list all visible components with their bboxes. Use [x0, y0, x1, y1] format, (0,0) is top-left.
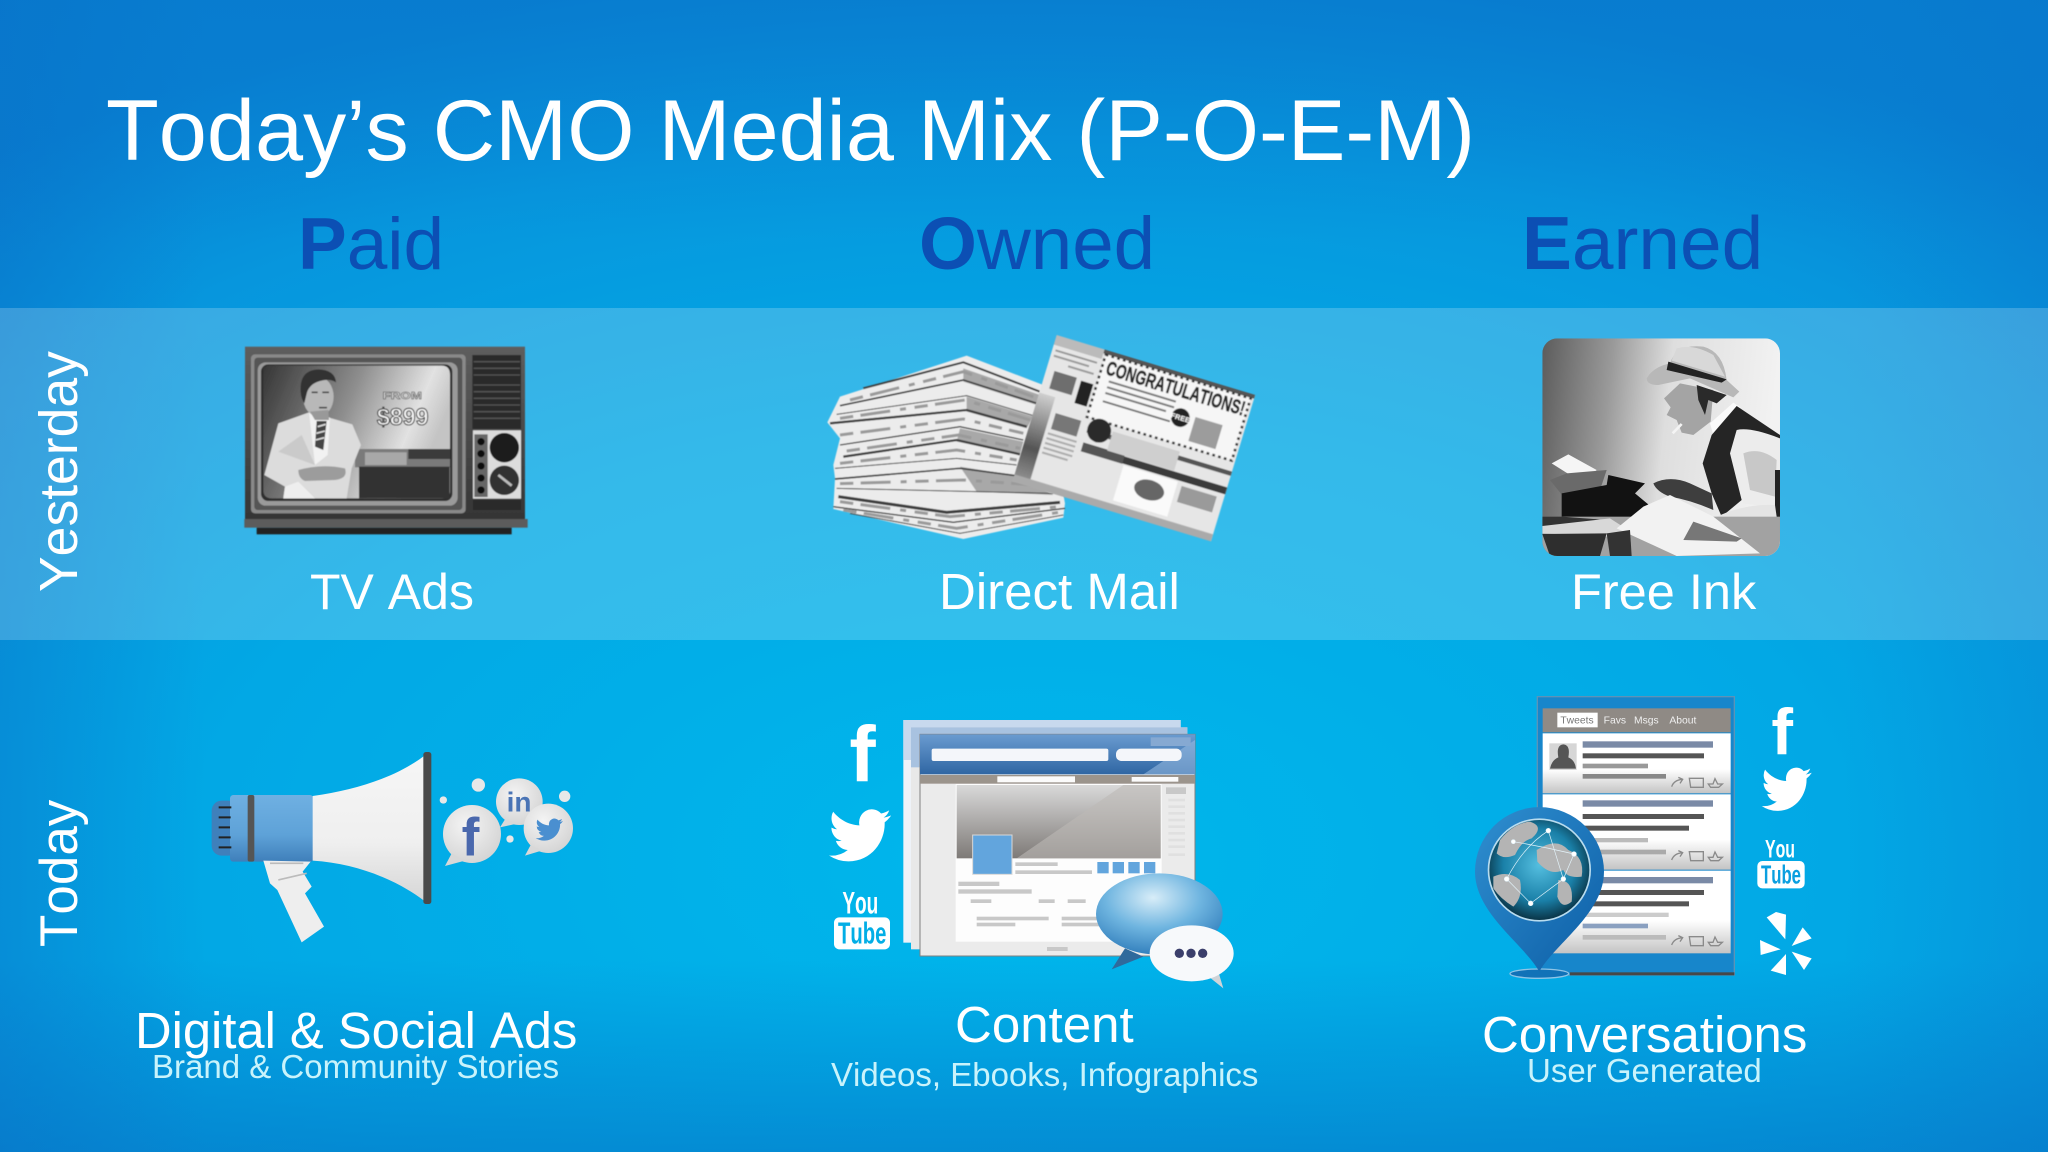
writer arm [1653, 479, 1713, 510]
heading: Paid: Paid [298, 204, 444, 285]
mail congratulations panel: FREE [1170, 411, 1191, 425]
label: Free Ink: Free Ink [1571, 563, 1757, 620]
mail congratulations panel: CONGRATULATIONS! [1103, 357, 1248, 420]
label: Digital & Social Ads: Digital & Social Ads [135, 1002, 577, 1059]
label: Direct Mail: Direct Mail [939, 563, 1180, 620]
feed tabs: Msgs [1634, 716, 1659, 727]
mail congratulations panel [1087, 355, 1251, 461]
icon: tweet feed page [1537, 697, 1734, 975]
feed tabs: Favs [1604, 716, 1626, 727]
desk and papers [1542, 495, 1780, 556]
globe network lines [1504, 828, 1576, 906]
blue speech bubble [1096, 873, 1223, 969]
Facebook logo: f [1771, 695, 1793, 768]
label: Content: Content [955, 996, 1134, 1053]
TV screen text: FROM [383, 391, 422, 402]
icons: Earned social logos [1757, 695, 1812, 975]
title: Today’s CMO Media Mix (P-O-E-M) [106, 83, 1475, 179]
TV screen text: $899 [377, 404, 428, 431]
icon: retro TV [244, 347, 528, 534]
icon: direct mail page [1012, 335, 1255, 541]
TV presenter [264, 369, 361, 498]
row label: Yesterday: Yesterday [30, 351, 89, 592]
YouTube logo: Tube [1761, 859, 1801, 889]
icon: megaphone with social bubbles [212, 752, 573, 942]
writer collar [1710, 403, 1740, 433]
writer face [1664, 383, 1713, 435]
feed tabs [1557, 713, 1696, 727]
writer shirt [1730, 427, 1780, 508]
Twitter logo [829, 809, 891, 861]
white speech bubble [1150, 925, 1234, 988]
feed action icons [1672, 777, 1722, 946]
YouTube logo: Tube [838, 916, 886, 950]
sublabel: Brand & Community Stories: Brand & Community Stories [152, 1048, 559, 1085]
YouTube logo: You [842, 885, 878, 920]
YouTube logo: You [1765, 836, 1795, 863]
icon: web page mockup with speech bubbles [903, 720, 1234, 988]
sublabel: User Generated: User Generated [1527, 1052, 1762, 1089]
globe continents [1493, 822, 1582, 907]
Facebook logo: f [849, 709, 876, 798]
heading: Owned: Owned [919, 202, 1155, 285]
feed tabs: Tweets [1560, 716, 1594, 727]
row label: Today: Today [30, 799, 89, 947]
Facebook bubble [443, 805, 501, 867]
band: Yesterday row [0, 308, 2048, 640]
Yelp logo [1760, 912, 1812, 975]
sublabel: Videos, Ebooks, Infographics: Videos, Ebooks, Infographics [831, 1056, 1258, 1093]
icons: Owned social logos [829, 709, 891, 950]
Twitter bubble [524, 804, 573, 856]
feed rows [1543, 733, 1731, 793]
LinkedIn bubble [496, 778, 543, 827]
YouTube logo [1757, 836, 1805, 889]
Facebook bubble: f [462, 808, 480, 867]
label: TV Ads: TV Ads [310, 564, 474, 620]
Twitter logo [1762, 768, 1812, 811]
icon: globe location pin [1475, 807, 1604, 978]
TV control panel [473, 430, 521, 499]
LinkedIn bubble: in [507, 787, 532, 818]
label: Conversations: Conversations [1482, 1006, 1807, 1063]
writer hat [1647, 346, 1739, 397]
TV screen text [377, 391, 428, 431]
icon: newspaper stack [827, 356, 1065, 539]
TV desk and VCR [355, 449, 450, 498]
heading: Earned: Earned [1522, 201, 1763, 285]
feed tabs: About [1669, 716, 1696, 727]
writer vest [1703, 406, 1780, 517]
TV speaker grille [472, 355, 521, 429]
typewriter [1552, 454, 1648, 517]
photo: writer at typewriter [1542, 338, 1780, 556]
YouTube logo [834, 885, 890, 950]
